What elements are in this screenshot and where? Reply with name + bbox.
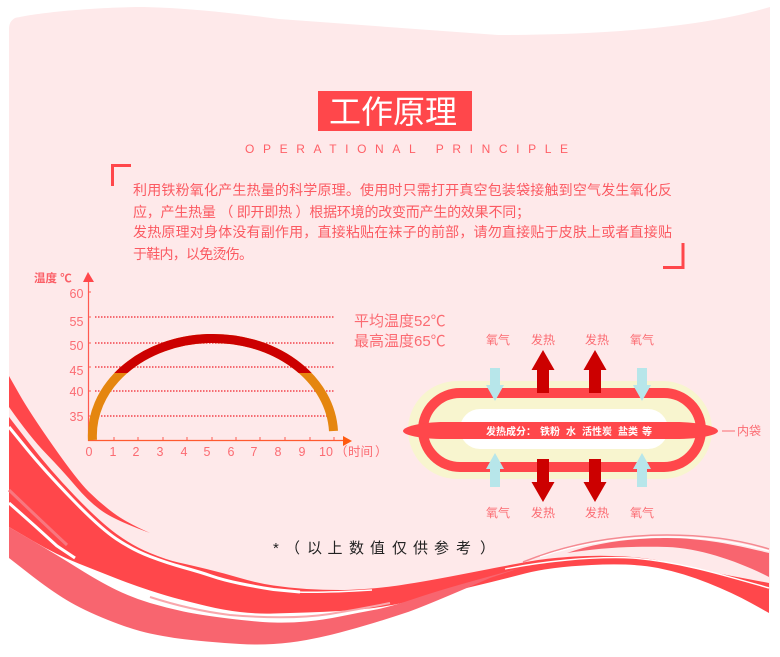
bottom labels: 氧气 xyxy=(630,505,654,520)
ingredients text: 等 xyxy=(642,425,652,438)
top labels: 发热 xyxy=(531,332,555,347)
temperature line chart xyxy=(34,271,388,459)
x axis with arrow xyxy=(88,436,352,446)
x axis values: 6 xyxy=(228,445,235,459)
top labels: 发热 xyxy=(585,332,609,347)
subtitle: OPERATIONAL PRINCIPLE xyxy=(245,142,568,156)
ingredients text: 发热成分： xyxy=(486,425,536,438)
y axis values: 50 xyxy=(70,339,83,353)
description paragraph: 利用铁粉氧化产生热量的科学原理。使用时只需打开真空包装袋接触到空气发生氧化反 xyxy=(133,182,672,198)
y axis values: 60 xyxy=(70,287,83,301)
x axis values: 9 xyxy=(299,445,306,459)
x axis values: 3 xyxy=(157,445,164,459)
x axis values xyxy=(86,445,333,459)
top labels xyxy=(486,332,654,347)
decorative ribbons xyxy=(9,376,769,644)
ingredients text: 活性炭 xyxy=(582,425,612,438)
inner bag label xyxy=(722,424,761,438)
description paragraph xyxy=(133,182,672,262)
y axis values: 45 xyxy=(70,364,83,378)
temperature notes: 平均温度52℃ xyxy=(354,313,446,330)
red pouch outline xyxy=(423,393,701,467)
dotted grid lines xyxy=(95,317,335,416)
ingredients text: 盐类 xyxy=(618,425,638,438)
x axis values: 8 xyxy=(275,445,282,459)
bottom labels: 发热 xyxy=(585,505,609,520)
outer cream capsule xyxy=(408,381,712,479)
oxygen arrows up xyxy=(486,453,651,487)
description paragraph: 发热原理对身体没有副作用，直接粘贴在袜子的前部，请勿直接贴于皮肤上或者直接贴 xyxy=(133,224,672,240)
x axis values: 7 xyxy=(251,445,258,459)
x axis values: 5 xyxy=(204,445,211,459)
y axis values xyxy=(70,287,83,424)
title: 工作原理 xyxy=(329,94,457,130)
x axis values: 0 xyxy=(86,445,93,459)
description paragraph: 于鞋内，以免烫伤。 xyxy=(133,246,253,262)
heat arrows up xyxy=(532,350,606,393)
oxygen arrows down xyxy=(486,368,651,401)
white inner pad xyxy=(460,409,668,449)
ingredients text: 水 xyxy=(566,425,576,438)
central red lens xyxy=(403,422,718,439)
x axis values: 10 xyxy=(319,445,333,459)
temperature notes xyxy=(354,313,446,350)
x axis values: 2 xyxy=(133,445,140,459)
bottom-right corner bracket xyxy=(663,243,683,268)
top-left corner bracket xyxy=(112,166,131,186)
y axis values: 35 xyxy=(70,410,83,424)
bottom labels: 发热 xyxy=(531,505,555,520)
x axis label: （时间） xyxy=(335,445,388,459)
ingredients text: 铁粉 xyxy=(540,425,560,438)
top labels: 氧气 xyxy=(486,332,510,347)
ingredients text xyxy=(486,425,652,438)
bottom labels: 氧气 xyxy=(486,505,510,520)
inner bag label: 内袋 xyxy=(737,424,761,438)
x axis values: 4 xyxy=(181,445,188,459)
y axis label: 温度 ℃ xyxy=(34,271,72,285)
y axis with arrow xyxy=(83,272,94,441)
y axis values: 40 xyxy=(70,385,83,399)
y axis values: 55 xyxy=(70,315,83,329)
disclaimer note: *（以上数值仅供参考） xyxy=(273,540,495,557)
heating pad diagram xyxy=(403,332,761,520)
top labels: 氧气 xyxy=(630,332,654,347)
x axis values: 1 xyxy=(110,445,117,459)
temperature notes: 最高温度65℃ xyxy=(354,333,446,350)
bottom labels xyxy=(486,505,654,520)
heat arrows down xyxy=(532,459,606,502)
description paragraph: 应，产生热量 （ 即开即热 ）根据环境的改变而产生的效果不同； xyxy=(133,204,530,221)
temperature curve xyxy=(92,338,334,440)
